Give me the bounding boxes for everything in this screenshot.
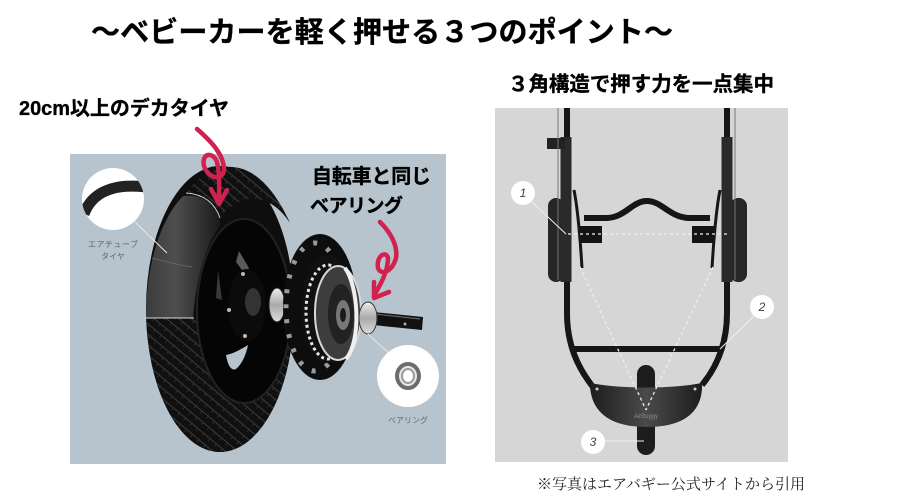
hub: sprocket: [283, 234, 361, 380]
callout: air tube tyre: エアチューブ: [88, 239, 138, 249]
front wheel: [637, 365, 655, 455]
title: ～ベビーカーを軽く押せる３つのポイント～: [91, 16, 673, 49]
heading: bearing: ベアリング: [310, 194, 403, 217]
frame: [547, 108, 735, 387]
callout: air tube tyre: [82, 168, 167, 261]
wheel: tyre: [145, 166, 294, 452]
heading: large tyre: 20cm以上のデカタイヤ: [19, 96, 229, 120]
marker 3: [581, 430, 644, 454]
hub: inner bearing: [269, 288, 285, 322]
rear wheels: [548, 198, 747, 282]
footboard: AirBuggy: [634, 414, 658, 420]
axle: [359, 302, 423, 334]
panel: wheel photo: [70, 154, 446, 464]
marker 3: 3: [590, 435, 597, 449]
caption: photo source: ※写真はエアバギー公式サイトから引用: [537, 475, 805, 493]
marker 2: 2: [758, 300, 766, 314]
marker 1: [511, 181, 566, 234]
triangle: dotted lines: [568, 234, 728, 410]
wheel: rim: [197, 219, 291, 403]
heading: same bearing as bicycle: 自転車と同じ: [312, 165, 431, 188]
callout: bearing: ベアリング: [388, 415, 428, 425]
marker 2: [720, 295, 774, 349]
arrow: to bearing: [374, 222, 396, 298]
panel: stroller frame photo: [495, 108, 788, 462]
marker 1: 1: [520, 186, 526, 200]
arrow: to tyre: [197, 129, 227, 204]
callout: air tube tyre: タイヤ: [101, 252, 125, 261]
callout: bearing: [368, 334, 439, 425]
heading: triangular structure: ３角構造で押す力を一点集中: [508, 72, 774, 96]
footboard: [590, 383, 702, 427]
